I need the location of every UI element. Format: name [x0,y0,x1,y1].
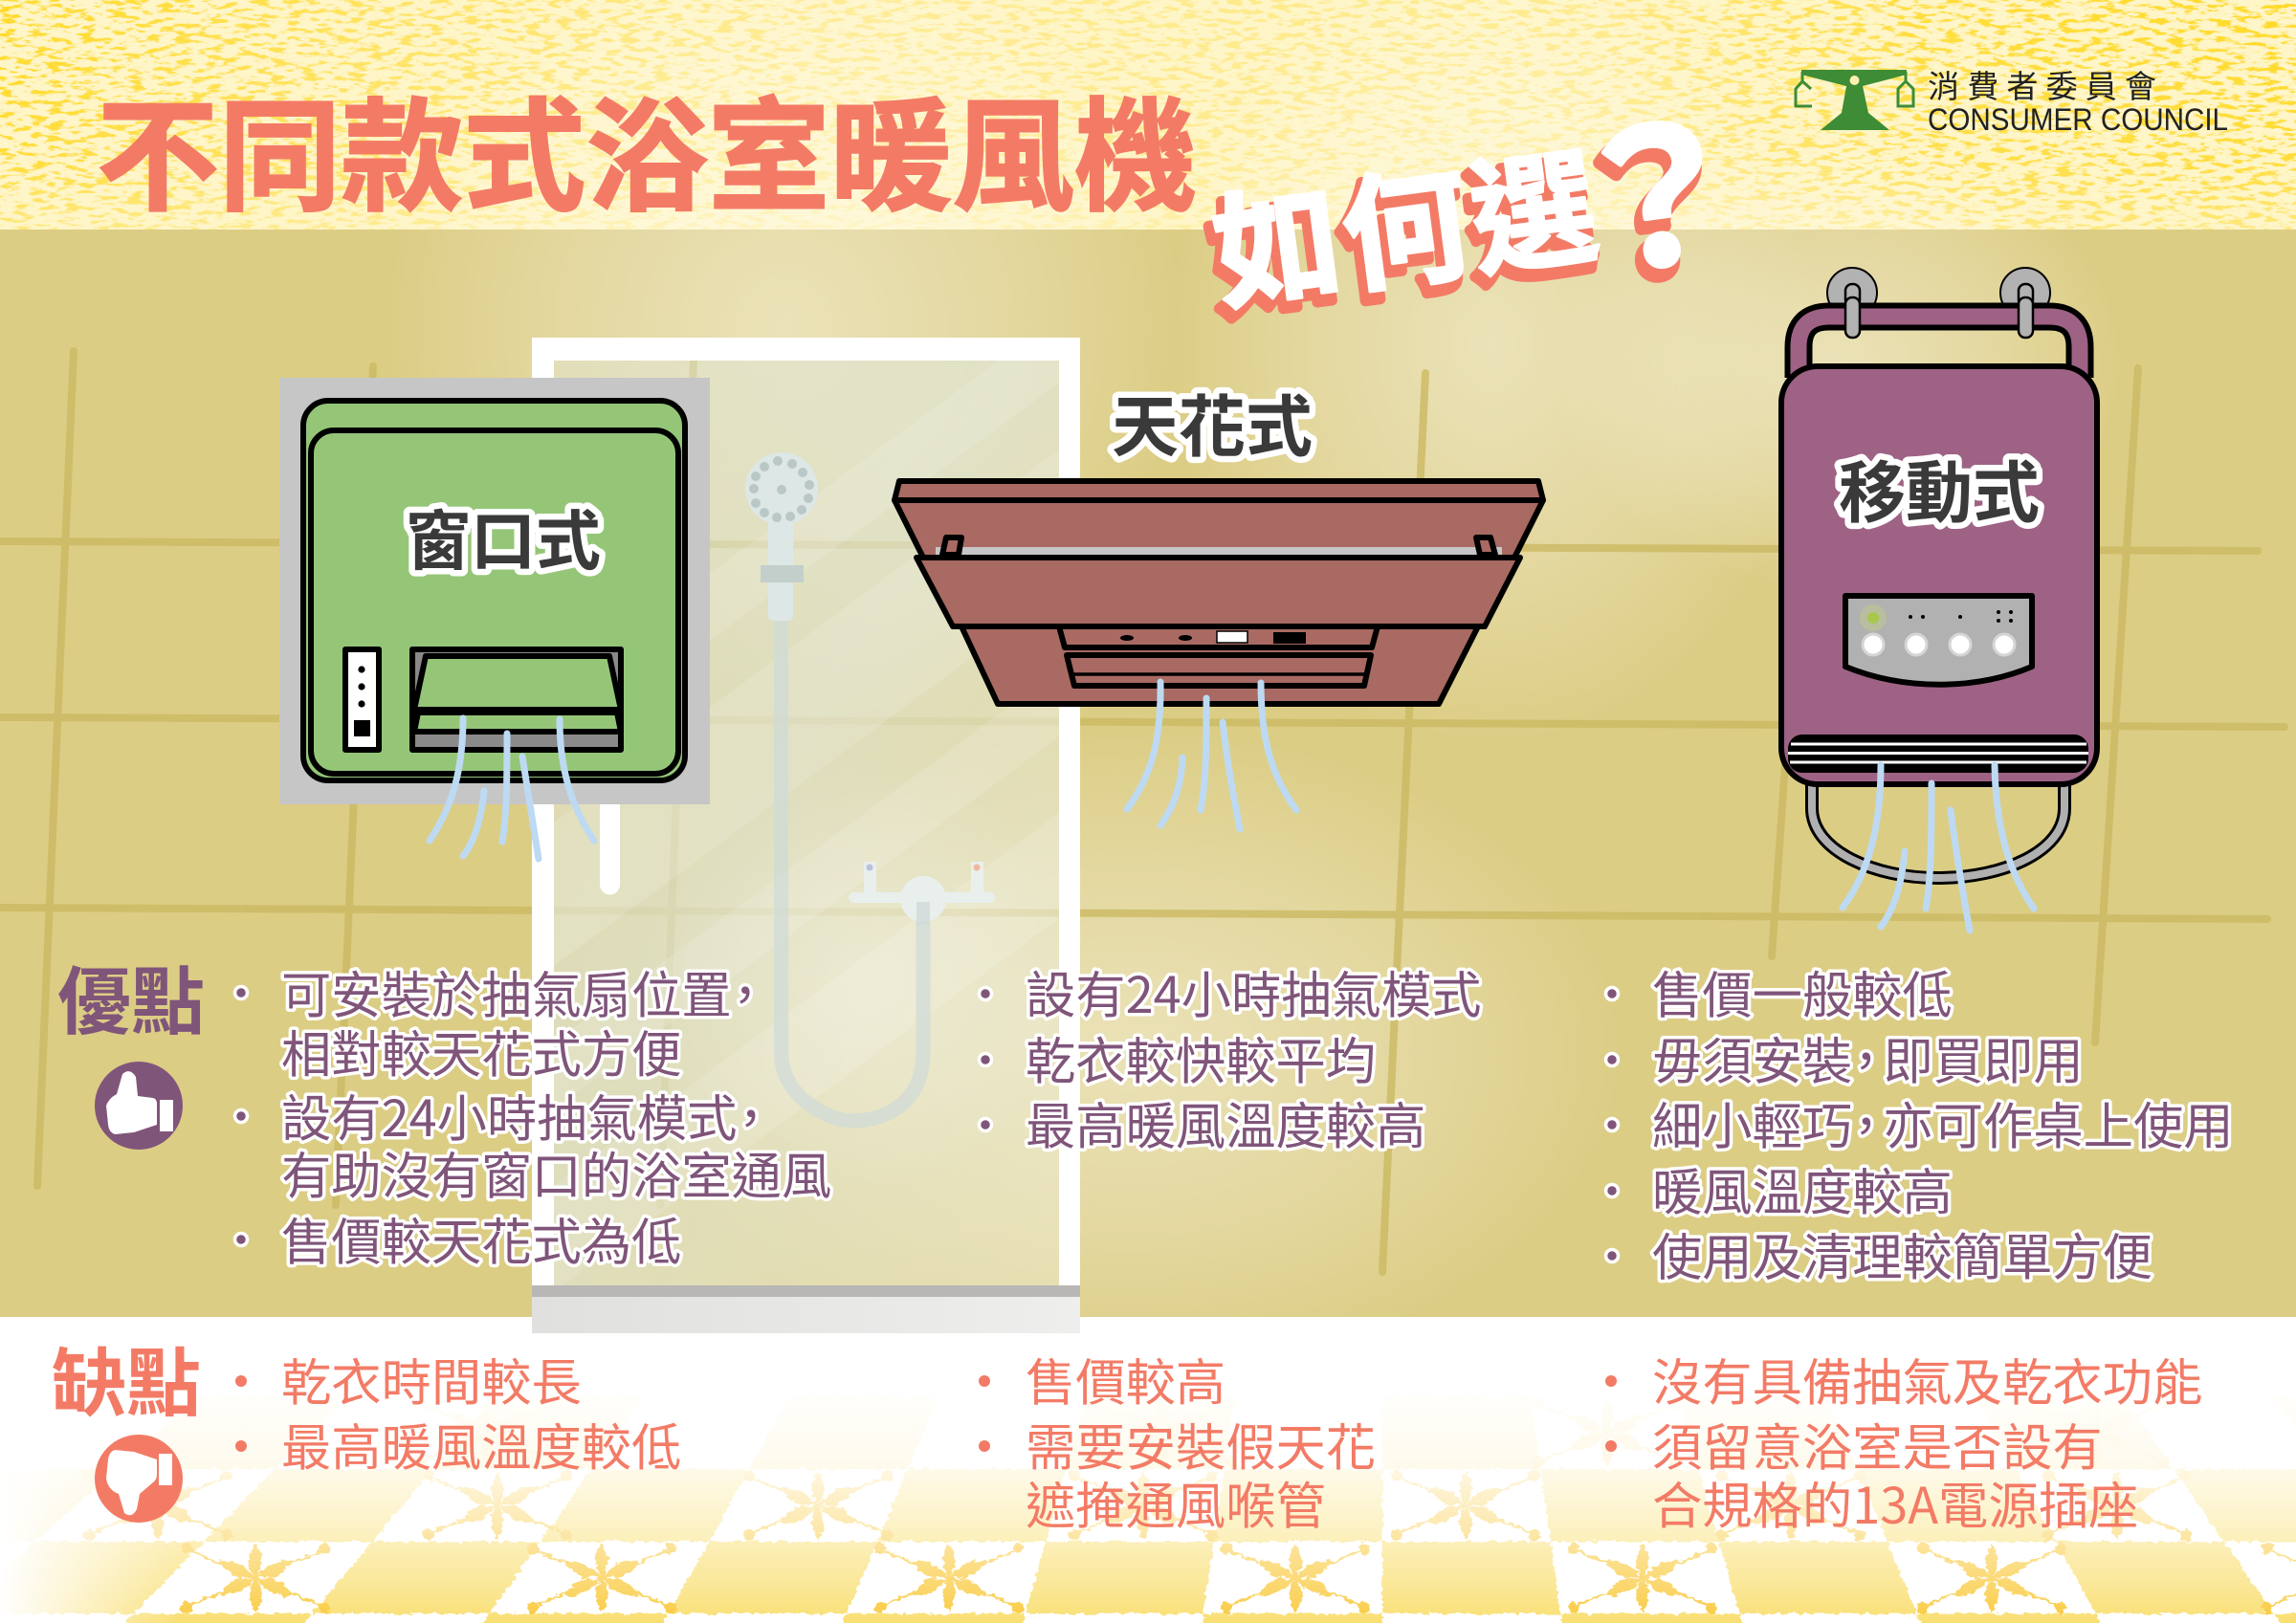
cons: portable type: 須留意浴室是否設有 [1652,1408,2103,1480]
logo emblem [1796,70,1913,130]
cons heading: 缺點 [52,1325,201,1432]
glass frame [532,338,1080,1285]
icon: thumbs up [95,1062,183,1150]
pros: portable type: 售價一般較低 [1652,955,1953,1028]
cons: window type: 最高暖風溫度較低 [281,1408,681,1480]
heater: portable type [1781,268,2097,931]
control panel [345,649,379,750]
label: 移動式 [1839,440,2040,537]
cons: ceiling type [979,1343,1376,1539]
pros: window type [235,955,831,1275]
pros: window type: 相對較天花式方便 [281,1015,681,1087]
vent [1067,655,1371,686]
label: 窗口式 [406,489,601,583]
pros: portable type: 使用及清理較簡單方便 [1652,1217,2152,1290]
air flow [430,718,594,859]
cons: window type [235,1343,681,1480]
cons: ceiling type: 售價較高 [1026,1343,1225,1415]
body [1781,366,2097,784]
title: 如何選: ？ [1541,49,1761,340]
pros heading: 優點 [57,944,205,1050]
shower head and hose [745,452,923,1121]
cons: ceiling type: 遮掩通風喉管 [1026,1466,1326,1539]
vent [1788,735,2088,773]
pros: ceiling type: 設有24小時抽氣模式 [1026,955,1481,1028]
display panel [1059,626,1378,647]
pros: window type: 可安裝於抽氣扇位置， [281,955,770,1028]
pros: ceiling type: 乾衣較快較平均 [1026,1021,1376,1094]
handle [1799,317,2080,378]
shower enclosure [532,316,1081,1333]
header textured band [0,0,2296,230]
floor tiles [0,1377,2296,1623]
cons: portable type [1605,1343,2202,1539]
air vent [412,649,621,750]
title: 不同款式浴室暖風機 [97,58,1197,235]
pros: portable type: 暖風溫度較高 [1652,1152,1953,1225]
cons: portable type: 沒有具備抽氣及乾衣功能 [1652,1343,2202,1415]
air flow [1843,765,2034,931]
pros: portable type: 毋須安裝，即買即用 [1652,1021,2084,1094]
title: 如何選: 如何選 [1202,105,1610,338]
cons: portable type: 合規格的13A電源插座 [1652,1466,2138,1539]
shower faucet [849,862,995,925]
pros: ceiling type: 最高暖風溫度較高 [1026,1086,1425,1159]
logo: Consumer Council [1796,61,2228,137]
air flow [1127,682,1296,829]
label: 天花式 [1112,374,1313,471]
pros: portable type [1605,955,2234,1290]
logo: Consumer Council: 消費者委員會 [1928,61,2164,107]
pros: window type: 設有24小時抽氣模式， [281,1079,776,1151]
pros: portable type: 細小輕巧，亦可作桌上使用 [1652,1086,2234,1159]
cons: window type: 乾衣時間較長 [281,1343,582,1415]
title: 如何選: 如何選 [1197,115,1605,346]
pros: window type: 售價較天花式為低 [281,1202,681,1275]
pros: ceiling type [980,955,1481,1159]
pros: window type: 有助沒有窗口的浴室通風 [281,1136,831,1209]
icon: thumbs down [95,1435,183,1523]
control panel [1845,596,2032,685]
cons: ceiling type: 需要安裝假天花 [1026,1408,1376,1480]
heater: ceiling type [894,374,1543,829]
title: 如何選 [1196,39,1767,346]
logo: Consumer Council: CONSUMER COUNCIL [1928,102,2228,137]
stand [1812,782,2064,878]
title: 如何選: ？ [1545,39,1766,331]
brackets [942,537,961,555]
heater: window type [279,378,710,859]
wall hooks [1827,268,2050,318]
towel rail below window unit [600,794,620,895]
